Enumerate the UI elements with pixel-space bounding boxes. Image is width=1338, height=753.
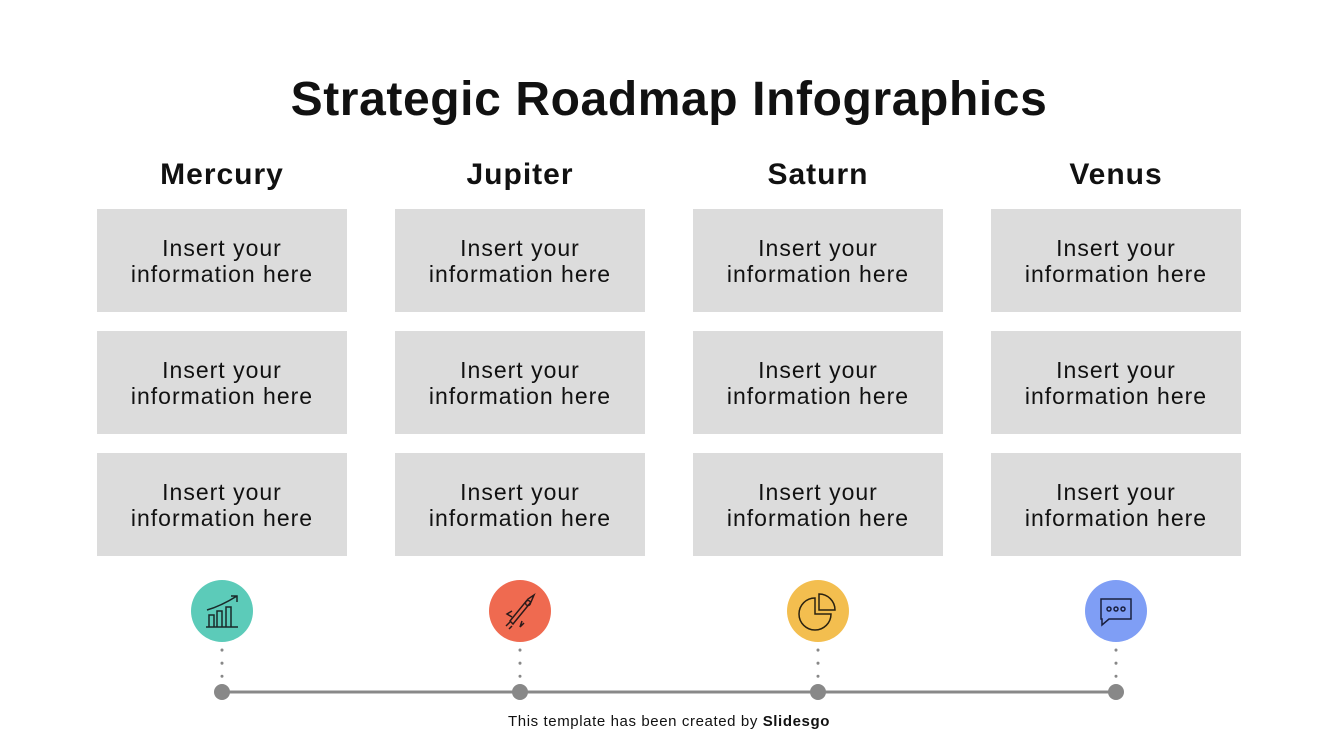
box s3: information here: [727, 504, 909, 530]
box m3: information here: [131, 504, 313, 530]
box m2: Insert your: [162, 356, 282, 382]
box v3: [991, 453, 1241, 556]
box j3: information here: [429, 504, 611, 530]
box s3: [693, 453, 943, 556]
box s3: Insert your: [758, 478, 878, 504]
heading: Mercury: Mercury: [160, 158, 284, 191]
box v1: information here: [1025, 260, 1207, 286]
box s1: [693, 209, 943, 312]
box v1: [991, 209, 1241, 312]
box s1: information here: [727, 260, 909, 286]
box v2: [991, 331, 1241, 434]
icon: chat: [1085, 580, 1147, 642]
heading: Saturn: Saturn: [767, 158, 868, 191]
title: Strategic Roadmap Infographics: [291, 73, 1047, 126]
box v1: Insert your: [1056, 234, 1176, 260]
box v2: information here: [1025, 382, 1207, 408]
box j1: [395, 209, 645, 312]
box j3: [395, 453, 645, 556]
box m1: Insert your: [162, 234, 282, 260]
box s2: [693, 331, 943, 434]
box j2: Insert your: [460, 356, 580, 382]
heading: Jupiter: Jupiter: [466, 158, 574, 191]
icon: growth chart: [191, 580, 253, 642]
box m2: information here: [131, 382, 313, 408]
box s2: information here: [727, 382, 909, 408]
box j3: Insert your: [460, 478, 580, 504]
box j1: Insert your: [460, 234, 580, 260]
box m3: Insert your: [162, 478, 282, 504]
icon: rocket: [489, 580, 551, 642]
box j2: information here: [429, 382, 611, 408]
box m2: [97, 331, 347, 434]
icon: pie chart: [787, 580, 849, 642]
box j2: [395, 331, 645, 434]
box m1: [97, 209, 347, 312]
box m1: information here: [131, 260, 313, 286]
box v2: Insert your: [1056, 356, 1176, 382]
box m3: [97, 453, 347, 556]
heading: Venus: Venus: [1069, 158, 1163, 191]
box j1: information here: [429, 260, 611, 286]
box v3: information here: [1025, 504, 1207, 530]
box s2: Insert your: [758, 356, 878, 382]
footer: This template has been created by Slidesgo: [508, 713, 830, 730]
box v3: Insert your: [1056, 478, 1176, 504]
box s1: Insert your: [758, 234, 878, 260]
